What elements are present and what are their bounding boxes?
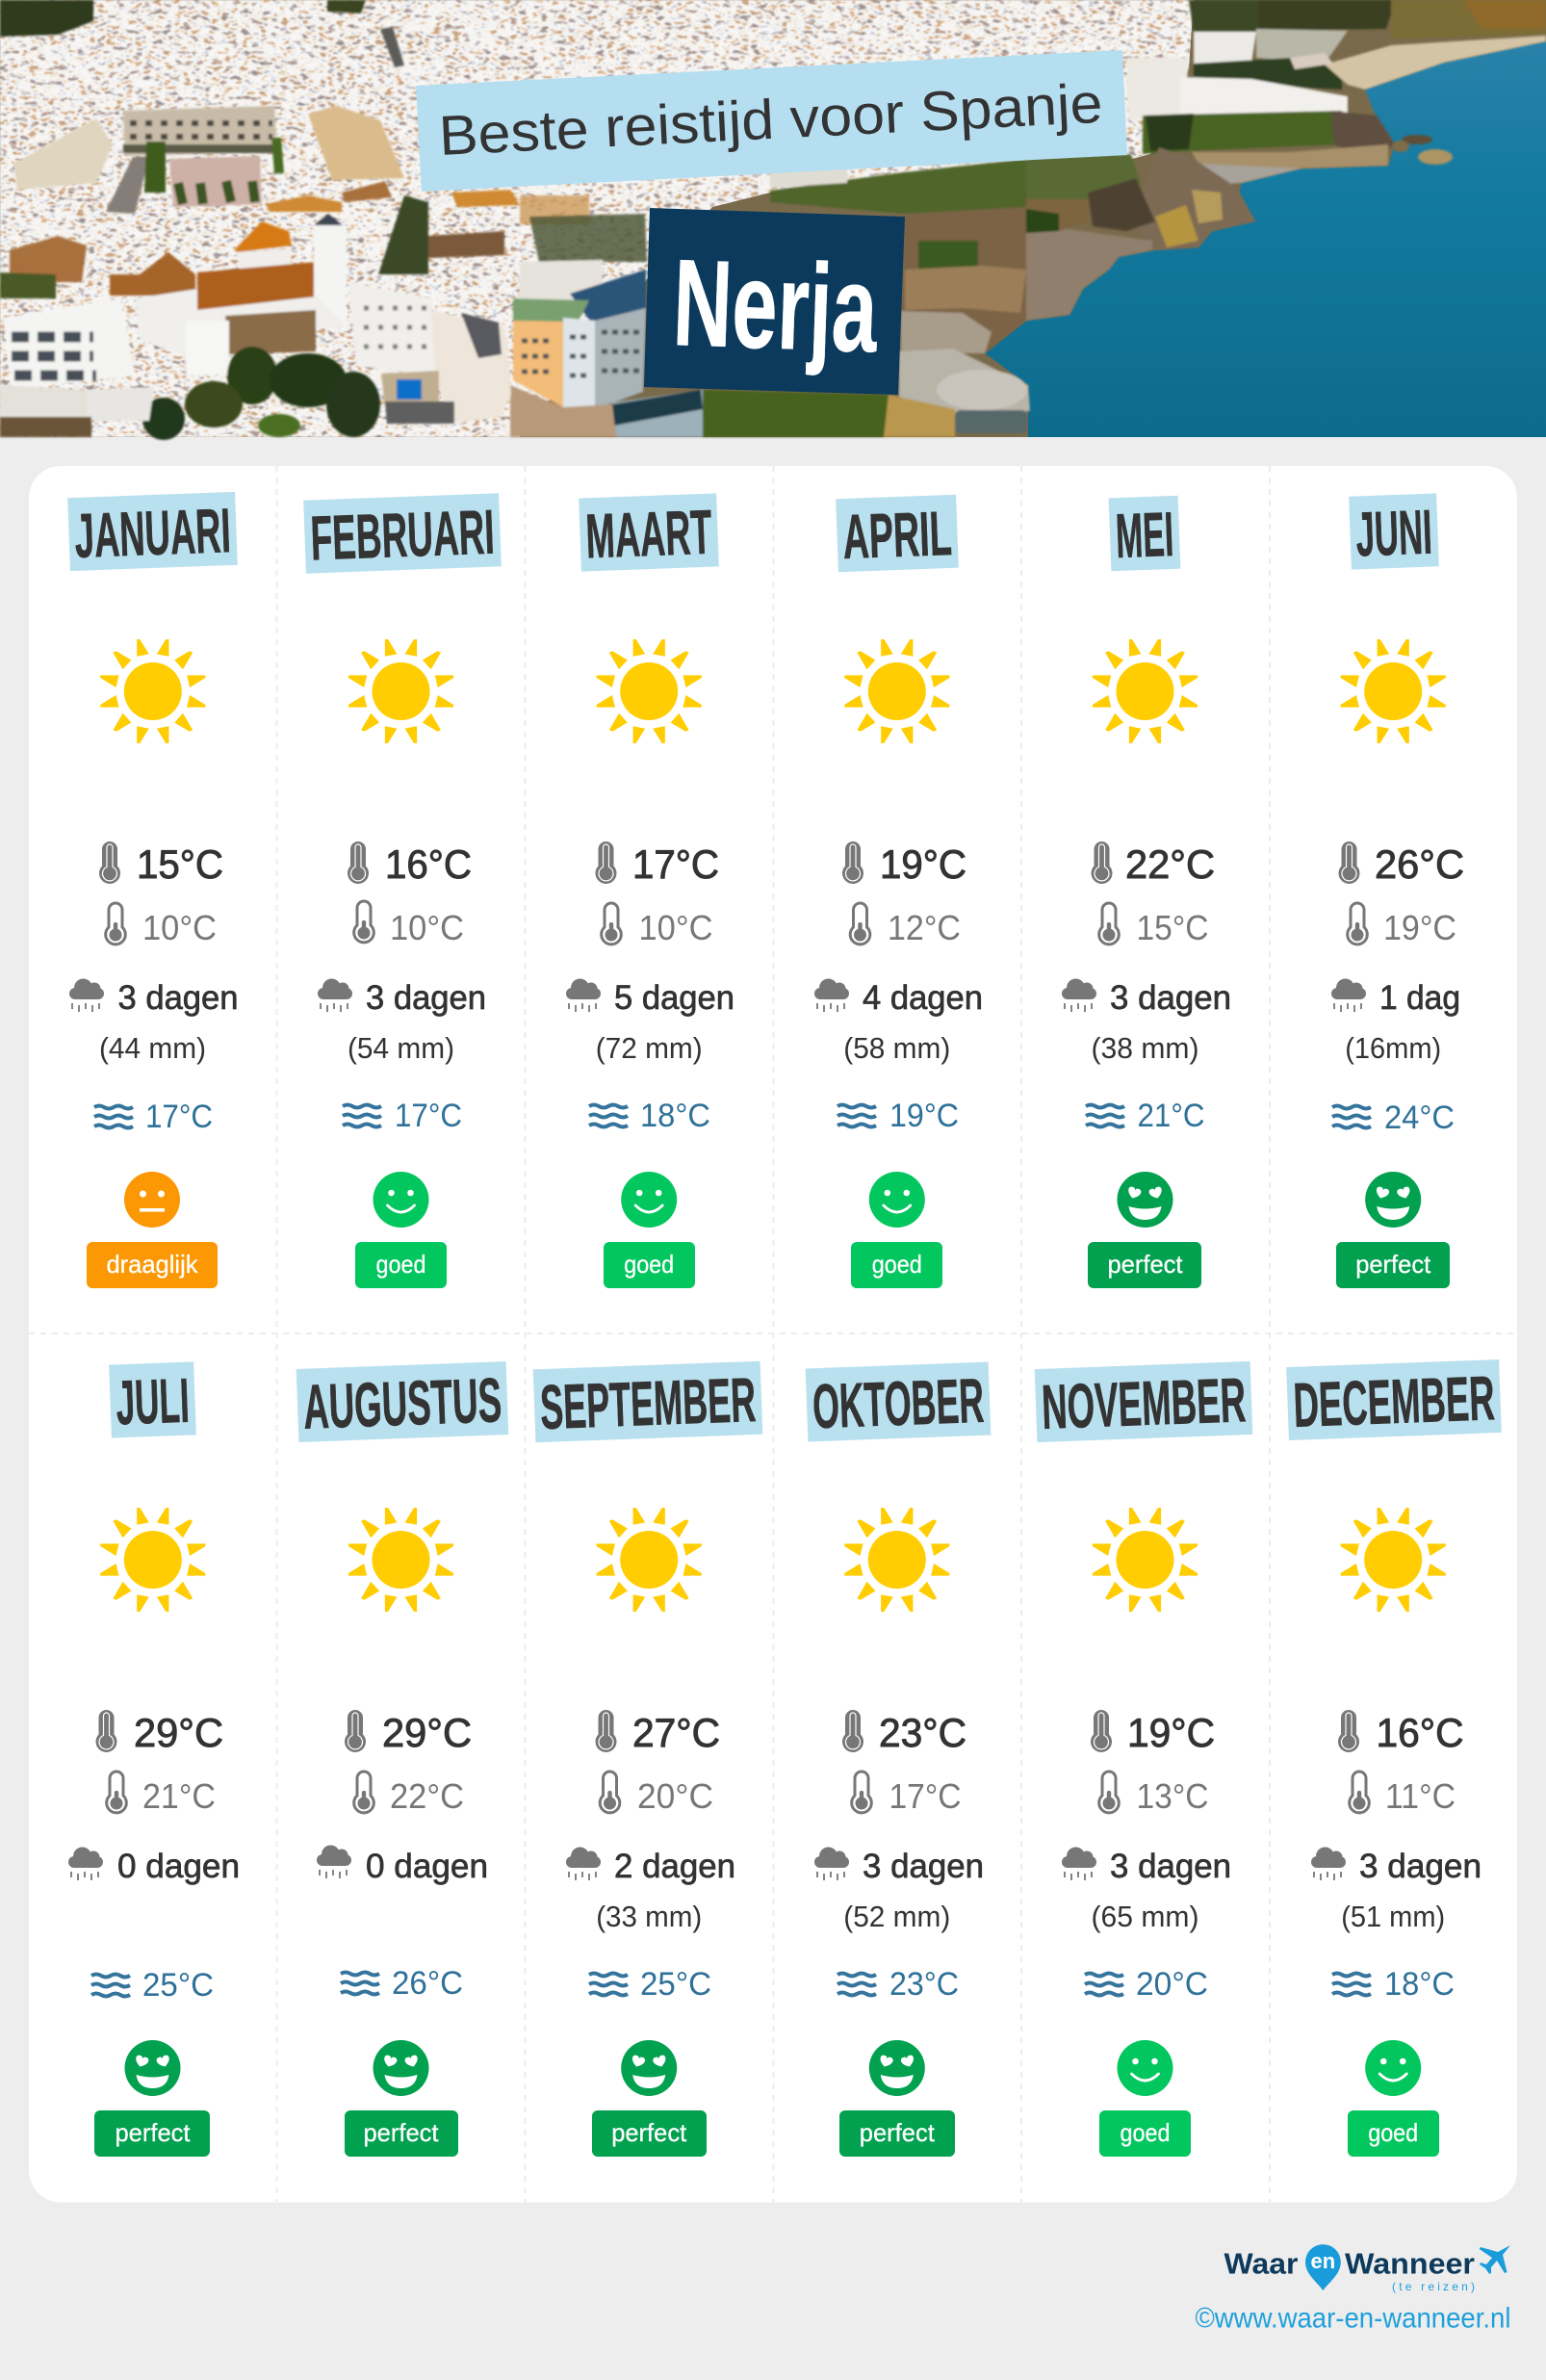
month label [67,492,238,571]
minimum temperature [852,1772,961,1816]
rain days: 3 dagen [1110,979,1231,1017]
maximum temperature: 26°C [1375,841,1464,887]
minimum temperature: 19°C [1383,908,1456,947]
logo: Waar en Wanneer (te reizen): Waar [1224,2247,1298,2280]
rainfall: (52 mm) [843,1900,950,1933]
sea temperature [1086,1098,1205,1134]
minimum temperature [600,1772,713,1816]
rainfall: (44 mm) [99,1031,206,1065]
rating [592,2040,707,2157]
rating: perfect [860,2118,936,2147]
sea temperature [589,1966,711,2003]
month label [579,493,719,572]
icon: sun [844,1508,949,1612]
maximum temperature [1091,1710,1215,1755]
month label: JULI [115,1365,191,1437]
rating: goed [872,1250,922,1279]
maximum temperature [96,1710,223,1755]
icon: sun [348,1508,453,1612]
icon: sun [348,639,453,743]
title banner [416,50,1127,192]
rating: perfect [611,2118,687,2147]
sea temperature: 21°C [1138,1098,1205,1134]
month label: AUGUSTUS [302,1364,502,1442]
month label [1035,1361,1252,1442]
logo: Waar en Wanneer (te reizen) [1224,2244,1510,2293]
month label [1109,496,1180,571]
rain days: 2 dagen [614,1848,735,1885]
rating: perfect [1355,1250,1431,1279]
rainfall: (58 mm) [843,1031,950,1065]
maximum temperature [842,841,966,887]
minimum temperature: 20°C [637,1776,713,1816]
rain days: 3 dagen [863,1848,984,1885]
panel: oktober [806,1362,991,2157]
sea temperature: 25°C [142,1967,214,2004]
minimum temperature: 21°C [142,1776,216,1816]
month label: FEBRUARI [309,497,496,573]
minimum temperature: 10°C [639,908,712,947]
logo: Waar en Wanneer (te reizen): (te reizen) [1392,2280,1475,2293]
maximum temperature: 23°C [879,1710,966,1755]
minimum temperature [106,903,217,947]
maximum temperature: 16°C [1377,1710,1463,1755]
maximum temperature [1338,1710,1463,1755]
sea temperature [837,1098,959,1134]
sea temperature [837,1966,959,2003]
month label [1349,493,1439,570]
rain days: 3 dagen [1359,1848,1482,1885]
icon: airplane [1480,2245,1510,2274]
rating [87,1172,218,1288]
rating [355,1172,447,1288]
panel: april [814,495,983,1288]
sea temperature [343,1098,462,1134]
rain days [566,978,734,1017]
website credit: ©www.waar-en-wanneer.nl [1196,2303,1511,2334]
sea temperature [341,1965,463,2002]
month label [109,1361,196,1438]
rain days [318,978,486,1017]
rain days: 3 dagen [1110,1848,1231,1885]
rating [345,2040,458,2157]
rating [839,2040,955,2157]
rating: draaglijk [106,1250,198,1279]
rain days: 0 dagen [366,1848,488,1885]
month label: NOVEMBER [1041,1364,1247,1442]
minimum temperature [1099,903,1209,947]
rating [1088,1172,1201,1288]
sea temperature: 24°C [1384,1099,1455,1136]
minimum temperature [1348,903,1456,947]
panel: november [1035,1361,1252,2157]
rating [1099,2040,1191,2157]
maximum temperature: 19°C [880,841,966,887]
minimum temperature: 10°C [390,908,464,947]
month label [533,1361,762,1442]
rain days: 4 dagen [863,979,983,1017]
panel: februari [303,493,502,1288]
icon: map pin: en [1311,2249,1335,2273]
rain days [69,978,239,1017]
maximum temperature: 17°C [632,841,719,887]
sea temperature: 19°C [889,1098,959,1134]
rainfall: (16mm) [1345,1031,1441,1065]
title banner: Beste reistijd voor Spanje [437,72,1104,168]
minimum temperature: 17°C [889,1776,961,1816]
sea temperature [1332,1099,1455,1136]
rating [94,2040,210,2157]
maximum temperature [348,841,472,887]
panel: juli [68,1361,240,2157]
rain days: 3 dagen [366,979,486,1017]
rainfall: (33 mm) [596,1900,702,1933]
maximum temperature: 29°C [134,1710,223,1755]
icon: map pin [1305,2244,1341,2290]
rating: perfect [116,2118,191,2147]
maximum temperature [595,1710,720,1755]
rainfall: (51 mm) [1341,1900,1445,1933]
rain days: 3 dagen [117,979,239,1017]
icon: sun [1093,639,1198,743]
month label: OKTOBER [812,1365,985,1441]
month label: MAART [584,497,713,571]
logo: Waar en Wanneer (te reizen): Wanneer [1345,2247,1475,2280]
maximum temperature [595,841,719,887]
rainfall: (65 mm) [1092,1900,1199,1933]
month label [806,1362,991,1441]
month label: MEI [1115,499,1174,571]
hero photo: aerial view of Nerja [0,0,1546,440]
sea temperature [1332,1966,1455,2003]
icon: sun [844,639,949,743]
city name banner: Nerja: Nerja [671,234,880,378]
rainfall: (38 mm) [1092,1031,1199,1065]
maximum temperature: 15°C [137,841,223,887]
maximum temperature: 16°C [385,841,472,887]
minimum temperature: 15°C [1136,908,1209,947]
rating: goed [1368,2118,1418,2147]
maximum temperature: 27°C [632,1710,720,1755]
month label: JANUARI [73,495,232,571]
rain days [317,1845,488,1885]
minimum temperature [1350,1772,1456,1816]
sea temperature: 18°C [640,1098,710,1134]
rainfall: (54 mm) [348,1031,454,1065]
minimum temperature: 11°C [1385,1776,1456,1816]
minimum temperature [354,901,464,947]
rain days [1331,978,1460,1017]
panel: augustus [296,1361,508,2157]
rain days: 0 dagen [117,1848,240,1885]
maximum temperature: 19°C [1127,1710,1215,1755]
month label [836,495,959,572]
rating: goed [624,1250,674,1279]
minimum temperature: 12°C [888,908,961,947]
month label [296,1361,508,1442]
rating: perfect [364,2118,439,2147]
month label: APRIL [841,498,953,572]
icon: sun [1341,639,1446,743]
panel: december [1286,1359,1502,2157]
panel: maart [566,493,734,1288]
sea temperature: 25°C [640,1966,711,2003]
icon: sun [597,1508,702,1612]
panel: climate table card [29,466,1517,2203]
rating [851,1172,942,1288]
panel: mei [1062,496,1231,1288]
icon: sun [597,639,702,743]
month label: SEPTEMBER [539,1364,757,1442]
month label: JUNI [1354,497,1433,569]
panel: september [533,1361,762,2157]
icon: sun [100,639,205,743]
sea temperature: 17°C [395,1098,462,1134]
table dividers [29,466,1517,2202]
maximum temperature [842,1710,966,1755]
rating: perfect [1107,1250,1183,1279]
panel: januari [67,492,239,1288]
sea temperature: 20°C [1136,1966,1208,2003]
city name banner: Nerja [644,208,905,395]
maximum temperature: 22°C [1125,841,1215,887]
minimum temperature [1099,1772,1209,1816]
sea temperature: 26°C [392,1965,463,2002]
sea temperature [91,1967,214,2004]
icon: sun [100,1508,205,1612]
sea temperature: 17°C [145,1099,213,1135]
rating: goed [375,1250,425,1279]
minimum temperature [107,1772,216,1816]
icon: sun [1341,1508,1446,1612]
sea temperature [589,1098,710,1134]
minimum temperature: 10°C [142,908,217,947]
sea temperature: 23°C [889,1966,959,2003]
sea temperature [94,1099,213,1135]
rain days: 1 dag [1379,979,1460,1017]
minimum temperature: 22°C [390,1776,464,1816]
maximum temperature: 29°C [382,1710,472,1755]
rain days [814,978,983,1017]
rain days: 5 dagen [614,979,734,1017]
rating: goed [1121,2118,1171,2147]
rainfall: (72 mm) [596,1031,703,1065]
rating [604,1172,695,1288]
icon: sun [1093,1508,1198,1612]
minimum temperature: 13°C [1136,1776,1209,1816]
minimum temperature [602,903,712,947]
month label [303,493,502,574]
minimum temperature [354,1772,464,1816]
sea temperature [1085,1966,1208,2003]
sea temperature: 18°C [1384,1966,1455,2003]
panel: juni [1331,493,1464,1288]
rating [1336,1172,1450,1288]
minimum temperature [850,903,961,947]
rating [1348,2040,1439,2157]
maximum temperature [99,841,223,887]
